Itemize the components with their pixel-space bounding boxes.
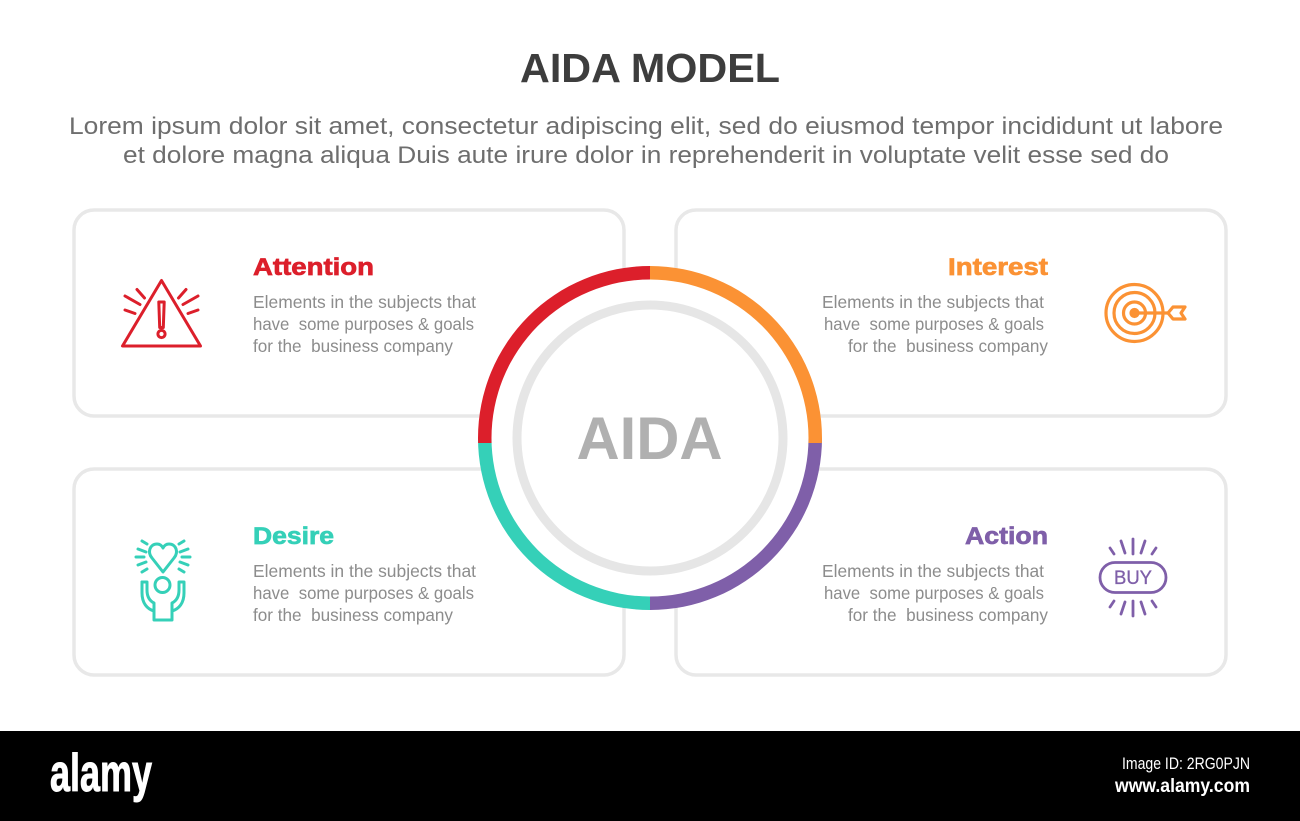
interest description: have some purposes & goals — [824, 314, 1044, 334]
attention description: for the business company — [253, 336, 453, 356]
title: AIDA MODEL — [520, 45, 780, 91]
center label: AIDA — [576, 405, 722, 472]
ring segment: interest — [650, 266, 822, 443]
footer url: www.alamy.com — [1114, 776, 1250, 797]
center circle diagram — [478, 266, 822, 610]
subtitle text block — [69, 113, 1223, 169]
panel: desire — [74, 469, 624, 675]
footer bar — [0, 731, 1300, 821]
action description: Elements in the subjects that — [822, 561, 1044, 581]
footer image id: Image ID: 2RG0PJN — [1122, 755, 1250, 773]
icon: buy button with rays: BUY — [1114, 568, 1152, 589]
subtitle text block: et dolore magna aliqua Duis aute irure dolor in reprehenderit in voluptate velit esse sed do — [123, 142, 1169, 169]
attention description — [253, 292, 476, 356]
attention description: have some purposes & goals — [253, 314, 474, 334]
icon: warning triangle — [122, 280, 200, 346]
attention card outline — [74, 210, 624, 416]
attention description: Elements in the subjects that — [253, 292, 476, 312]
subtitle text block: Lorem ipsum dolor sit amet, consectetur adipiscing elit, sed do eiusmod tempor incididunt ut labore — [69, 113, 1223, 140]
interest description — [822, 292, 1048, 356]
panel: interest — [676, 210, 1226, 416]
desire heading: Desire — [253, 523, 334, 550]
interest heading: Interest — [948, 254, 1048, 281]
icon: buy button with rays — [1100, 539, 1166, 616]
action description: for the business company — [848, 605, 1048, 625]
icon: heart above raised hands — [136, 541, 190, 620]
panel: action — [676, 469, 1226, 675]
icon: target with arrow — [1106, 284, 1185, 342]
desire description: have some purposes & goals — [253, 583, 474, 603]
desire description — [253, 561, 476, 625]
interest description: Elements in the subjects that — [822, 292, 1044, 312]
interest description: for the business company — [848, 336, 1048, 356]
footer logo: alamy — [50, 744, 152, 803]
inner grey ring — [517, 305, 783, 571]
desire description: Elements in the subjects that — [253, 561, 476, 581]
ring segment: action — [650, 438, 822, 610]
desire description: for the business company — [253, 605, 453, 625]
ring segment: attention — [478, 266, 650, 443]
desire card outline — [74, 469, 624, 675]
action description: have some purposes & goals — [824, 583, 1044, 603]
action description — [822, 561, 1048, 625]
panel: attention — [74, 210, 624, 416]
action card outline — [676, 469, 1226, 675]
ring segment: desire — [478, 438, 650, 610]
white backing disc — [478, 266, 822, 610]
interest card outline — [676, 210, 1226, 416]
attention heading: Attention — [253, 254, 374, 281]
action heading: Action — [965, 523, 1048, 550]
